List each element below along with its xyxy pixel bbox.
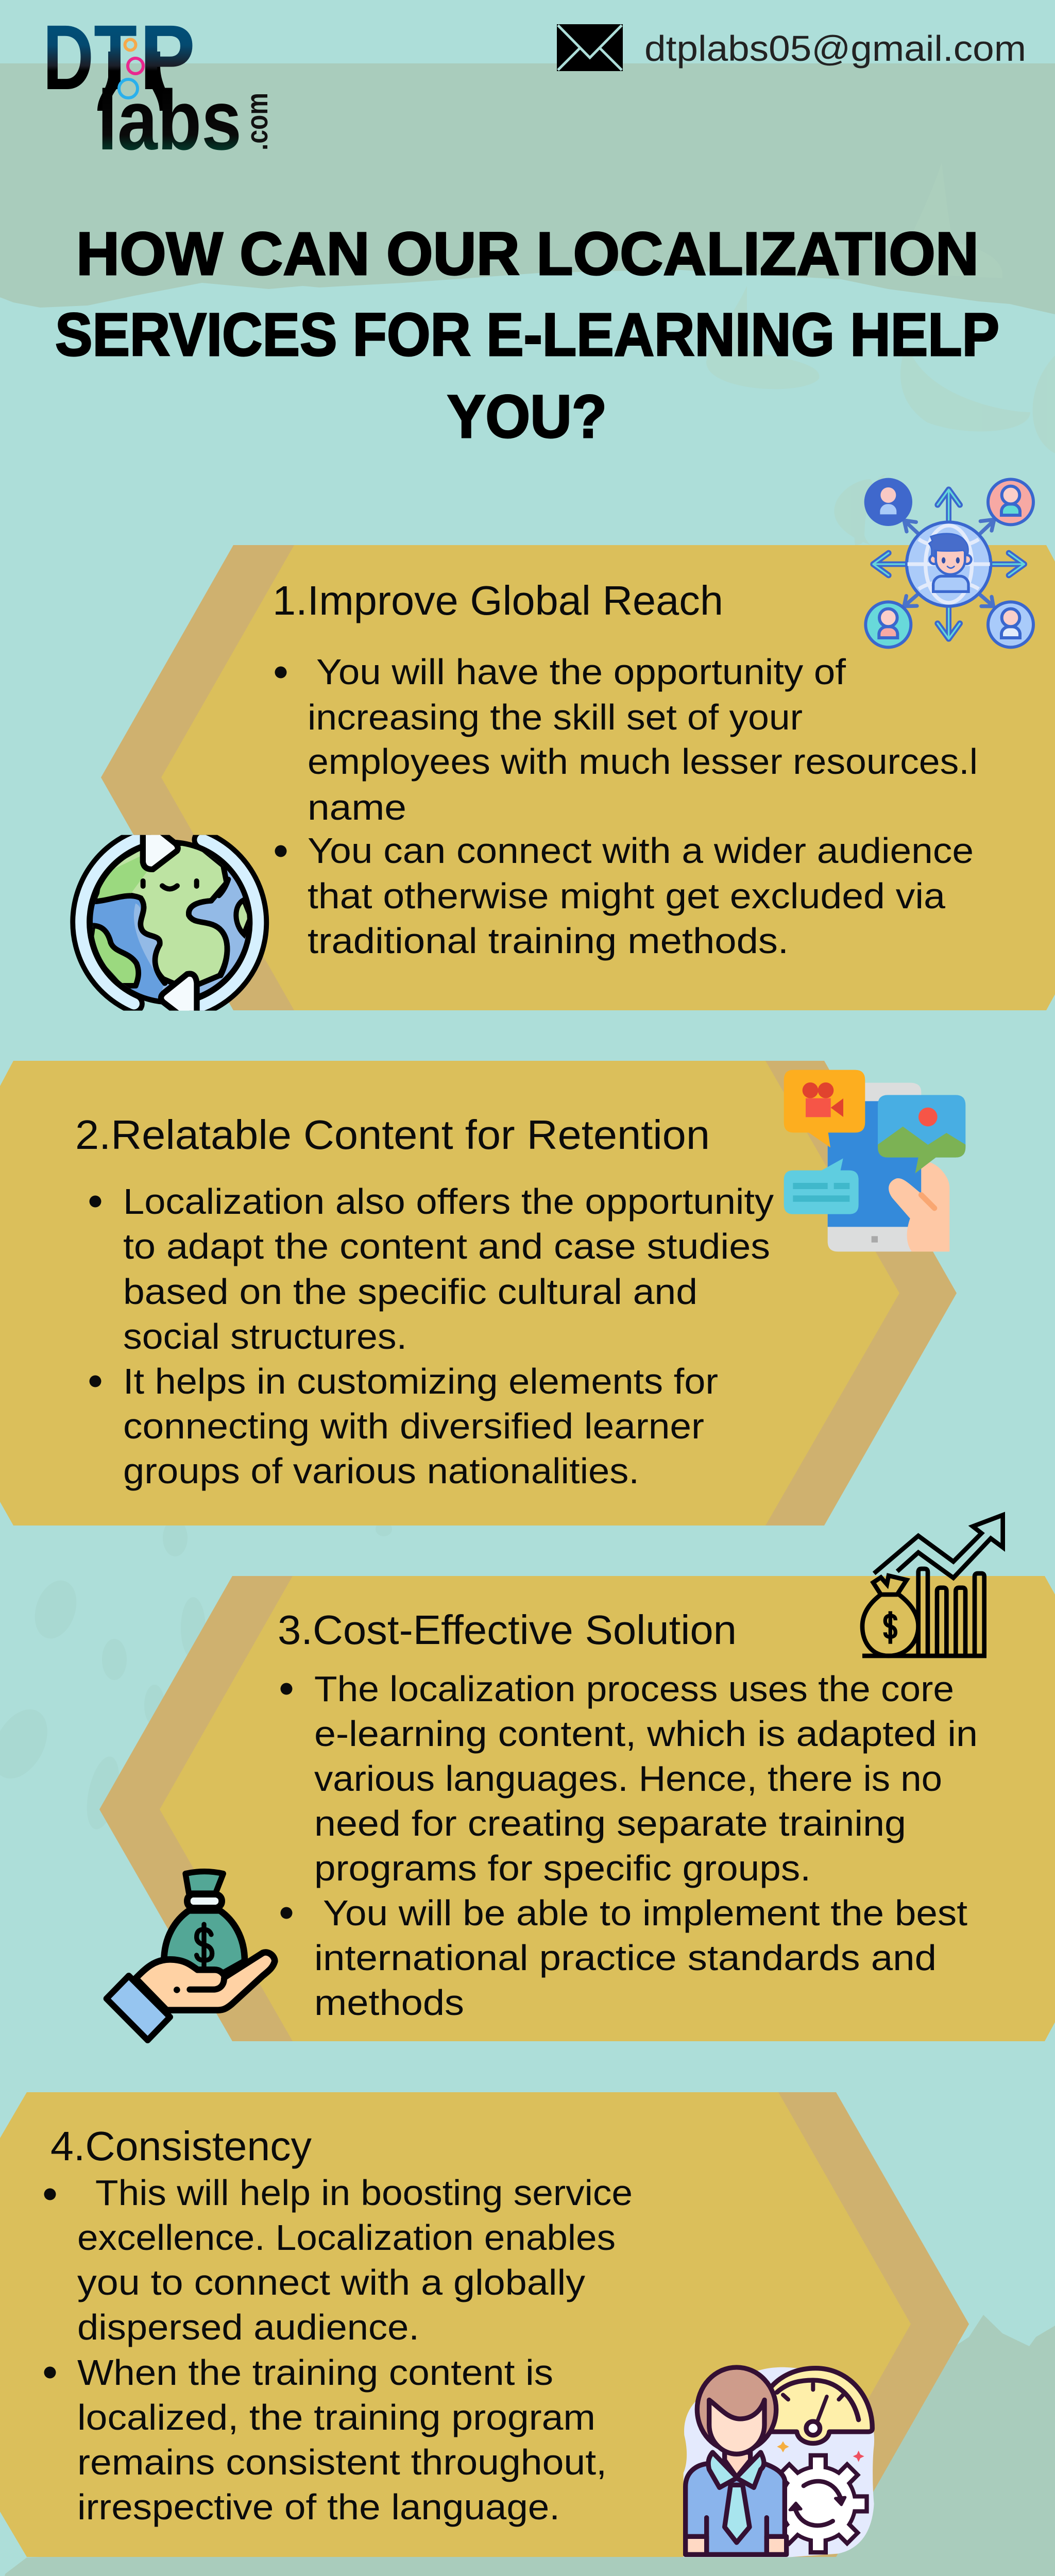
user circle: pink [988, 479, 1033, 524]
sparkle orange [777, 2441, 789, 2452]
title: SERVICES FOR E-LEARNING HELP [55, 301, 999, 369]
bullet list 1: You will have the opportunity of [316, 652, 846, 692]
panel: 2 relatable content for retention [0, 1061, 957, 1526]
sparkle red [853, 2451, 864, 2462]
icon: globe people network [864, 478, 1033, 647]
bullet list 3: various languages. Hence, there is no [314, 1758, 942, 1799]
cuff [107, 1976, 170, 2040]
bullet list 4: excellence. Localization enables [77, 2217, 616, 2258]
bullet list 4: remains consistent throughout, [77, 2442, 607, 2482]
ring arrowheads [143, 829, 178, 869]
faint decorative background shapes [706, 163, 1055, 545]
user circle: teal [865, 602, 911, 647]
bullet list 1: traditional training methods. [308, 921, 789, 961]
circular arrow ring [81, 838, 258, 1007]
bullet list 3: programs for specific groups. [314, 1848, 811, 1888]
bullet list 4: irrespective of the language. [77, 2487, 560, 2527]
bullet list 3: You will be able to implement the best [323, 1893, 967, 1933]
icon: person with gauge and gear [684, 2367, 874, 2557]
earth face [143, 881, 197, 889]
user circle: dark blue [864, 478, 912, 526]
gauge [768, 2368, 872, 2443]
bullet list 1: You can connect with a wider audience [308, 831, 974, 871]
icon: phone with media bubbles [784, 1070, 965, 1251]
panel: 3 cost-effective solution [99, 1576, 1055, 2041]
bullet list 2: It helps in customizing elements for [123, 1361, 718, 1401]
heading 3: 3.Cost-Effective Solution [278, 1607, 737, 1653]
heading 1: 1.Improve Global Reach [273, 578, 723, 623]
bullet list 4: you to connect with a globally [77, 2262, 585, 2302]
bullet list 2: connecting with diversified learner [123, 1406, 704, 1446]
bullet list 3: methods [314, 1982, 464, 2023]
bullet list 2 [90, 1181, 774, 1491]
bars [862, 1569, 984, 1656]
logo letter P: P [140, 6, 195, 109]
phone body [828, 1083, 921, 1251]
user circle: light blue [988, 602, 1033, 647]
bullet list 3 [280, 1669, 978, 2023]
bullet list 2: social structures. [123, 1316, 407, 1357]
icon: smiling earth with arrows [81, 829, 258, 1016]
logo: DTP labs [43, 6, 274, 167]
person [686, 2367, 787, 2554]
logo word labs: labs [97, 73, 242, 167]
video bubble [784, 1070, 865, 1147]
heading 2: 2.Relatable Content for Retention [75, 1112, 710, 1158]
icon: money bag and rising chart [862, 1515, 1003, 1656]
bullet list 1: increasing the skill set of your [308, 697, 803, 737]
panel: 4 consistency [0, 2092, 969, 2557]
rising arrow [874, 1515, 1003, 1578]
bullet list 1: that otherwise might get excluded via [308, 876, 945, 916]
bullet list 1: employees with much lesser resources.l [308, 741, 978, 782]
top brush band [0, 63, 1055, 314]
bullet list 4: dispersed audience. [77, 2307, 419, 2347]
logo word .com: .com [241, 93, 274, 150]
dollar sign [885, 1611, 895, 1644]
bullet list 2: groups of various nationalities. [123, 1451, 639, 1491]
title: YOU? [447, 383, 607, 451]
panel: 1 improve global reach [101, 545, 1055, 1010]
bag [164, 1910, 245, 1973]
globe with person [907, 522, 991, 606]
bullet list 2: based on the specific cultural and [123, 1272, 697, 1312]
bullet list 3: need for creating separate training [314, 1803, 906, 1843]
bullet list 4: This will help in boosting service [95, 2173, 633, 2213]
icon background blob [684, 2367, 874, 2557]
hand [889, 1161, 949, 1251]
bullet list 4: localized, the training program [77, 2397, 595, 2437]
faint spots mid page [0, 1519, 392, 1832]
picture bubble [878, 1095, 965, 1173]
bullet list 3: international practice standards and [314, 1938, 937, 1978]
bullet list 3: The localization process uses the core [314, 1669, 954, 1709]
bottom brush band [0, 2315, 1055, 2576]
bullet list 4: When the training content is [77, 2352, 553, 2393]
icon: envelope [557, 24, 623, 71]
title: HOW CAN OUR LOCALIZATION [76, 220, 979, 288]
money bag [862, 1575, 918, 1656]
chat bubble [784, 1158, 859, 1214]
bullet list 1: name [308, 787, 406, 827]
heading 4: 4.Consistency [50, 2123, 312, 2169]
bullet list 3: e-learning content, which is adapted in [314, 1714, 978, 1754]
title [55, 220, 999, 451]
email address: dtplabs05@gmail.com [644, 28, 1026, 69]
logo rings [119, 39, 143, 98]
icon: hand holding money bag [107, 1871, 275, 2040]
gear [768, 2453, 869, 2554]
bullet list 4 [44, 2173, 633, 2527]
hand [135, 1953, 275, 2010]
bullet list 2: Localization also offers the opportunity [123, 1181, 774, 1222]
bullet list 1 [275, 652, 978, 961]
bullet list 2: to adapt the content and case studies [123, 1226, 770, 1266]
logo letters DT: DT [43, 6, 137, 109]
